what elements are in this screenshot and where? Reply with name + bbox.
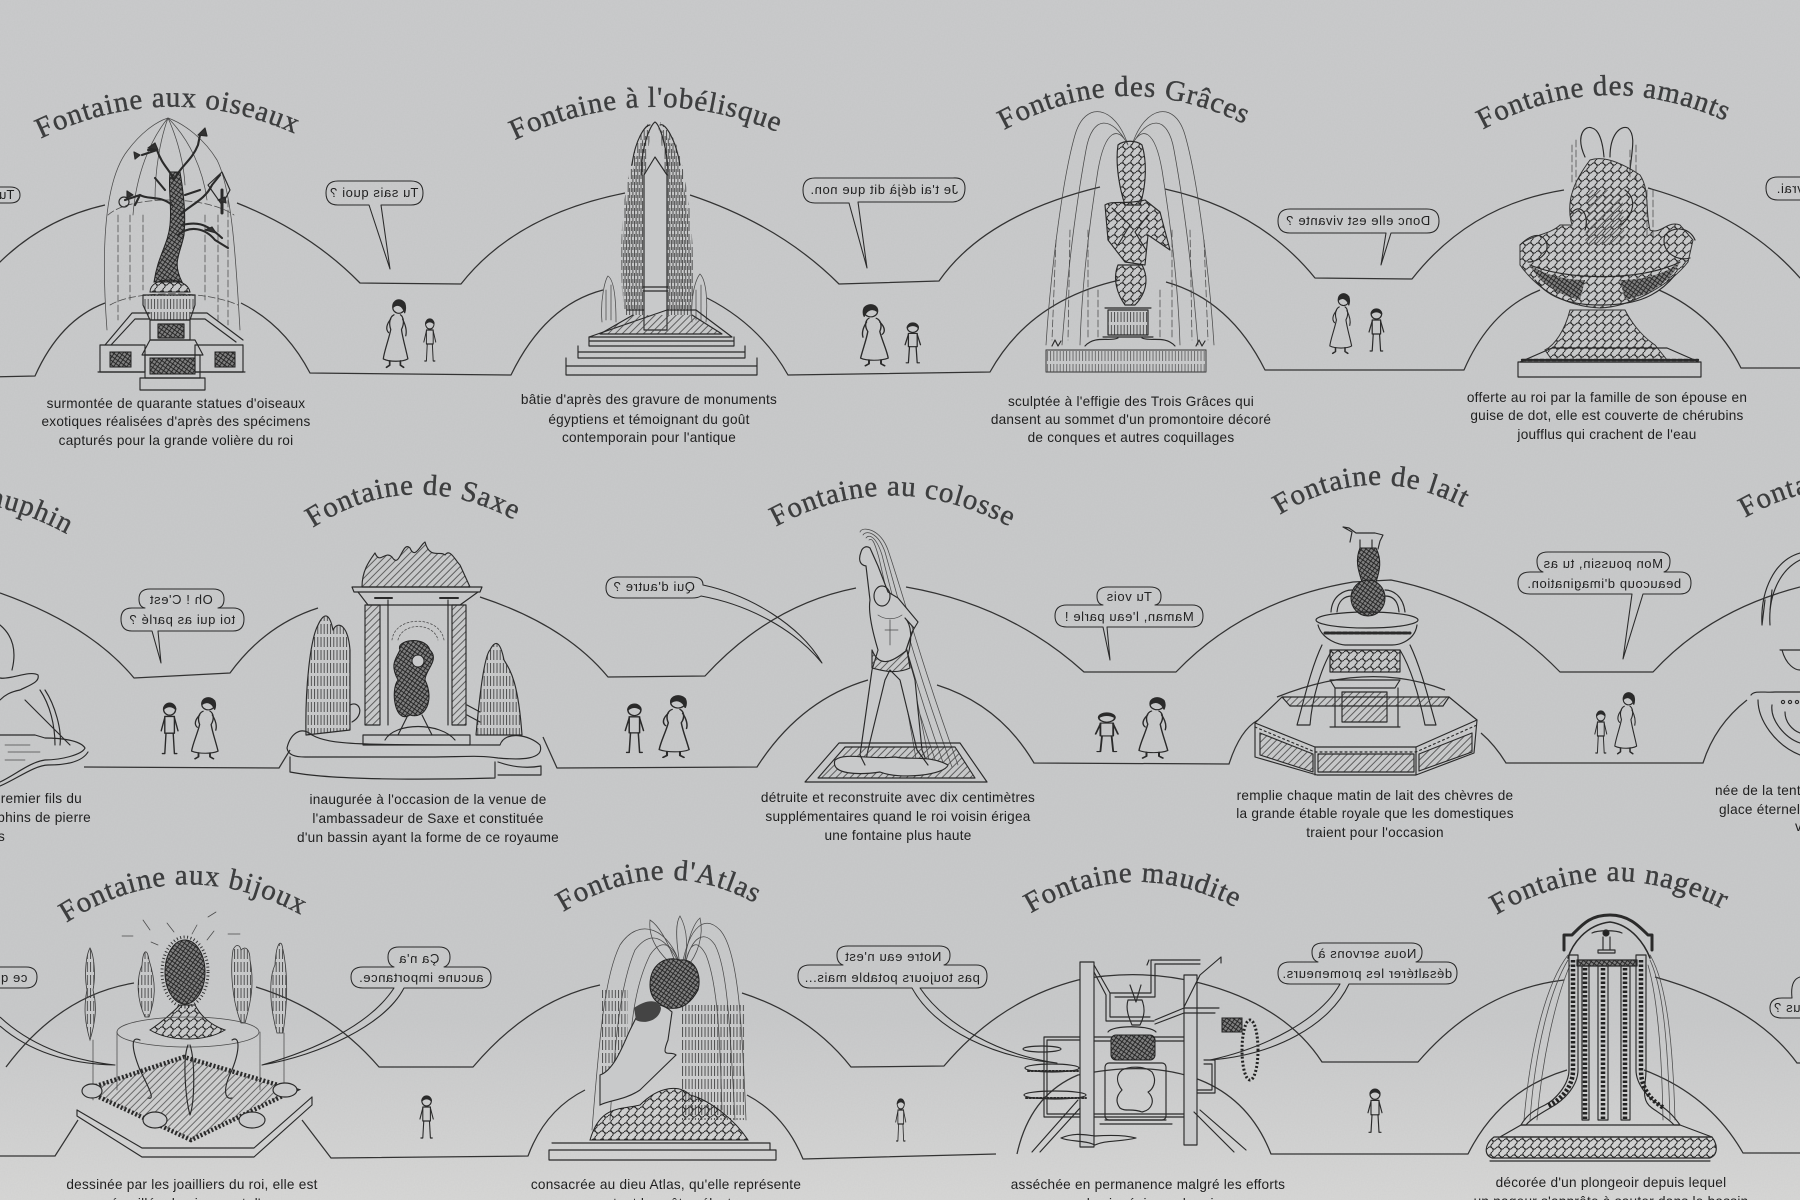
illustration: Atlas fountain [549, 916, 776, 1160]
row 2 lower arches [84, 677, 1747, 768]
description [521, 392, 777, 445]
panel: Fontaine de Saxe [286, 474, 559, 845]
description [531, 1177, 801, 1200]
speech bubble: Tu vois Maman, l'eau parle: Maman, l'eau parle ! [1064, 609, 1194, 624]
title: Fontaine des amants [1474, 74, 1729, 130]
description: capturés pour la grande volière du roi [59, 433, 293, 448]
illustration: three graces fountain [1046, 112, 1214, 372]
figure: boy looking up 2 [896, 1099, 906, 1141]
description [991, 394, 1271, 445]
description: d'un bassin ayant la forme de ce royaume [297, 830, 559, 845]
description [761, 790, 1035, 843]
illustration: milk fountain [1255, 527, 1477, 775]
speech bubble: Oh ! C'est toi qui as parlé: Oh ! C'est [149, 592, 213, 607]
title: Fontaine des Grâces [996, 76, 1248, 130]
speech bubble: Je t'ai déjà dit que non: Je t'ai déjà dit que non. [810, 182, 958, 197]
description: exotiques réalisées d'après des spécimens [41, 414, 311, 429]
description: l'ambassadeur de Saxe et constituée [312, 811, 544, 826]
figures: child and mother 7 [1595, 693, 1637, 754]
row 3 upper arches [6, 975, 1800, 1067]
title: Fontaine aux bijoux [57, 868, 306, 922]
title: Fontaine maudite [1022, 866, 1239, 913]
description: traient pour l'occasion [1306, 825, 1444, 840]
illustration: birdcage fountain [98, 118, 245, 390]
panel: Fontaine aux bijoux [57, 868, 318, 1200]
figure: boy looking up 1 [420, 1096, 433, 1138]
panel: Fontaine de glace (cropped) [1715, 480, 1800, 834]
speech bubble: Qui d'autre: Qui d'autre ? [613, 579, 695, 594]
illustration: ice fountain [1751, 553, 1800, 755]
figures: mother and child 2 [861, 305, 920, 366]
description: la grande étable royale que les domestiques [1236, 806, 1514, 821]
speech bubble: Ça n'a aucune importance: aucune importance. [359, 970, 483, 985]
description: surmontée de quarante statues d'oiseaux [47, 396, 305, 411]
panel: Fontaine de lait [1236, 466, 1514, 840]
description: remier fils du [1, 791, 82, 806]
illustration: lovers fountain [1518, 127, 1701, 377]
illustration: swimmer fountain [1486, 915, 1716, 1161]
panel: Fontaine maudite [1011, 866, 1285, 1200]
description: consacrée au dieu Atlas, qu'elle représente [531, 1177, 801, 1192]
description: décorée d'un plongeoir depuis lequel [1496, 1175, 1726, 1190]
speech bubble: Ça n'a aucune importance [262, 947, 491, 1065]
speech bubble: Nous servons à désaltérer les promeneurs [1210, 943, 1457, 1060]
description: offerte au roi par la famille de son épouse en [1467, 390, 1747, 405]
figures: child and mother 6 [1096, 698, 1168, 758]
description: une fontaine plus haute [824, 828, 972, 843]
figures: child and mother 5 [625, 696, 689, 757]
description: dessinée par les joailliers du roi, elle est [66, 1177, 318, 1192]
speech bubble: Tu vois Maman, l'eau parle: Tu vois [1106, 589, 1152, 604]
title: Fontaine à l'obélisque [507, 86, 780, 140]
row 3 lower arches [0, 1069, 1800, 1159]
speech bubble: vrai (cropped right) [1766, 177, 1800, 200]
illustration: colossus fountain [805, 529, 987, 782]
speech bubble: Tu vois Maman, l'eau parle [1055, 587, 1203, 660]
title: Fontaine de lait [1270, 466, 1469, 514]
panel: Fontaine du dauphin (cropped) [0, 494, 91, 844]
description: contemporain pour l'antique [562, 430, 736, 445]
panel: Fontaine d'Atlas [531, 860, 801, 1200]
speech bubble: us ? (cropped right) [1770, 977, 1800, 1018]
description [1467, 390, 1747, 442]
panel: Fontaine au colosse [761, 481, 1035, 843]
illustration: dolphin fountain [0, 625, 88, 786]
title: Fontaine au colosse [768, 481, 1014, 526]
speech bubble: Mon poussin, tu as beaucoup d'imagination: beaucoup d'imagination. [1527, 576, 1681, 591]
description: dansent au sommet d'un promontoire décoré [991, 412, 1271, 427]
panel: Fontaine des amants [1467, 74, 1747, 442]
description: asséchée en permanence malgré les efforts [1011, 1177, 1285, 1192]
description: née de la tent [1715, 783, 1800, 798]
description [0, 791, 91, 844]
speech bubble: Tu sais quoi (cropped left) [0, 187, 20, 203]
description: détruite et reconstruite avec dix centimètres [761, 790, 1035, 805]
speech bubble: Donc elle est vivante: Donc elle est vivante ? [1286, 213, 1430, 228]
speech bubble: Oh ! C'est toi qui as parlé: toi qui as parlé ? [129, 612, 235, 627]
speech bubble: Qui d'autre [606, 577, 822, 663]
description [66, 1177, 318, 1200]
description: guise de dot, elle est couverte de chérubins [1470, 408, 1744, 423]
description [1474, 1175, 1748, 1200]
description: de conques et autres coquillages [1028, 430, 1234, 445]
speech bubble: Oh ! C'est toi qui as parlé [121, 589, 244, 663]
description: sculptée à l'effigie des Trois Grâces qui [1008, 394, 1254, 409]
title: Fontaine aux oiseaux [33, 92, 299, 138]
row 1 lower arches [0, 280, 1800, 377]
description: supplémentaires quand le roi voisin érigea [765, 809, 1031, 824]
figures: mother and child 3 [1330, 294, 1384, 353]
title: Fontaine d'Atlas [554, 860, 760, 912]
speech bubble: us ? (cropped right): us ? [1774, 1000, 1800, 1015]
description [1715, 783, 1800, 834]
description [297, 792, 559, 845]
illustration: Saxe fountain [287, 542, 541, 779]
speech bubble: Notre eau n'est pas toujours potable mais: Notre eau n'est [845, 949, 941, 964]
panel: Fontaine au nageur [1474, 867, 1748, 1200]
description [1236, 788, 1514, 840]
speech bubble: Mon poussin, tu as beaucoup d'imagination: Mon poussin, tu as [1543, 556, 1663, 571]
speech bubble: Notre eau n'est pas toujours potable mais [798, 946, 1057, 1063]
speech bubble: ce qu (cropped left) [0, 967, 115, 1065]
illustration: jewel fountain [77, 912, 312, 1157]
row 1 upper arches [0, 187, 1800, 284]
speech bubble: Notre eau n'est pas toujours potable mais: pas toujours potable mais... [804, 970, 980, 985]
description: joufflus qui crachent de l'eau [1516, 427, 1697, 442]
panel: Fontaine à l'obélisque [507, 86, 780, 445]
panel: Fontaine des Grâces [991, 76, 1271, 445]
speech bubble: Tu sais quoi: Tu sais quoi ? [330, 185, 418, 200]
figure: boy looking up 3 [1368, 1089, 1382, 1132]
speech bubble: Nous servons à désaltérer les promeneurs: Nous servons à [1317, 946, 1416, 961]
row 2 upper arches [0, 580, 1800, 678]
description [41, 396, 311, 448]
speech bubble: Ça n'a aucune importance: Ça n'a [398, 951, 439, 966]
panel: Fontaine aux oiseaux [33, 92, 311, 448]
description: égyptiens et témoignant du goût [548, 412, 750, 427]
description: inaugurée à l'occasion de la venue de [309, 792, 547, 807]
speech bubble: Donc elle est vivante [1278, 209, 1439, 265]
description: remplie chaque matin de lait des chèvres de [1237, 788, 1513, 803]
illustration: cursed fountain machine [1023, 957, 1258, 1152]
description: bâtie d'après des gravure de monuments [521, 392, 777, 407]
title: Fontaine au nageur [1488, 867, 1728, 915]
figures: child and mother 4 [161, 698, 218, 759]
description [1011, 1177, 1285, 1200]
speech bubble: Tu sais quoi [326, 181, 423, 269]
figures: mother and child 1 [383, 300, 436, 367]
illustration: obelisk fountain [566, 122, 757, 375]
speech bubble: Je t'ai déjà dit que non [803, 178, 965, 268]
speech bubble: Nous servons à désaltérer les promeneurs: désaltérer les promeneurs. [1282, 966, 1452, 981]
speech bubble: Mon poussin, tu as beaucoup d'imagination [1518, 552, 1691, 659]
title: Fontaine de Saxe [303, 474, 518, 528]
